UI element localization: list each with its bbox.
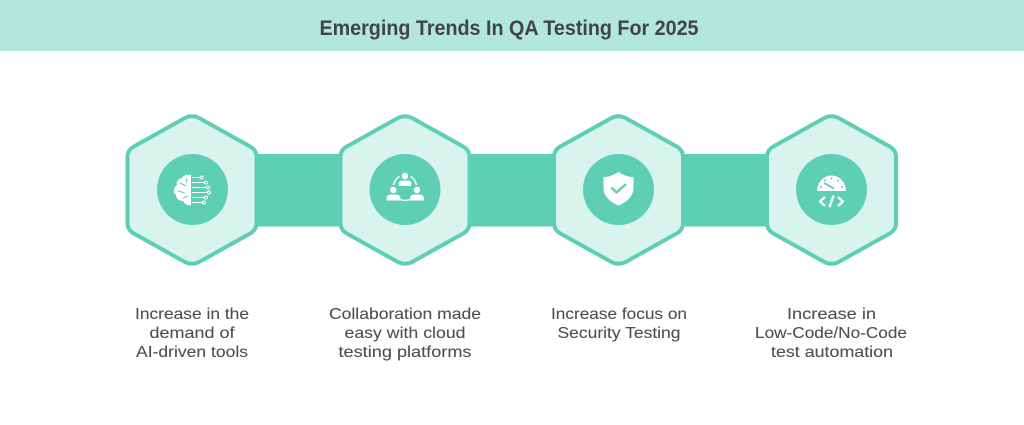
label 4: test automation <box>771 344 893 361</box>
hexagon 1 <box>128 116 256 264</box>
label 1: AI-driven tools <box>136 344 248 361</box>
circle 4 <box>796 154 867 225</box>
icon: shield check <box>604 172 634 206</box>
header banner <box>0 0 1024 51</box>
label 1 <box>135 306 249 361</box>
circle 2 <box>370 154 440 225</box>
label 1: demand of <box>150 325 235 342</box>
step 3: security testing <box>551 116 687 342</box>
label 2 <box>329 306 481 361</box>
label 2: testing platforms <box>338 344 472 361</box>
step 4: low-code automation <box>755 116 907 361</box>
label 3: Security Testing <box>558 325 680 342</box>
circle 3 <box>583 154 654 225</box>
connector band <box>240 154 850 226</box>
icon: gauge and code <box>817 176 846 207</box>
title: Emerging Trends In QA Testing For 2025 <box>320 17 699 40</box>
label 4: Increase in <box>787 306 876 323</box>
circle 1 <box>157 154 228 225</box>
icon: brain circuit <box>174 175 210 205</box>
label 4: Low-Code/No-Code <box>755 325 907 342</box>
icon: team collaboration <box>386 173 424 200</box>
hexagon 3 <box>554 116 683 264</box>
label 2: easy with cloud <box>344 325 466 342</box>
label 1: Increase in the <box>135 306 249 323</box>
step 2: cloud collaboration <box>329 116 481 361</box>
label 2: Collaboration made <box>329 306 481 323</box>
step 1: AI-driven tools <box>128 116 256 361</box>
hexagon 2 <box>340 116 470 264</box>
label 3 <box>551 306 687 342</box>
label 4 <box>755 306 907 361</box>
label 3: Increase focus on <box>551 306 687 323</box>
hexagon 4 <box>767 116 896 264</box>
